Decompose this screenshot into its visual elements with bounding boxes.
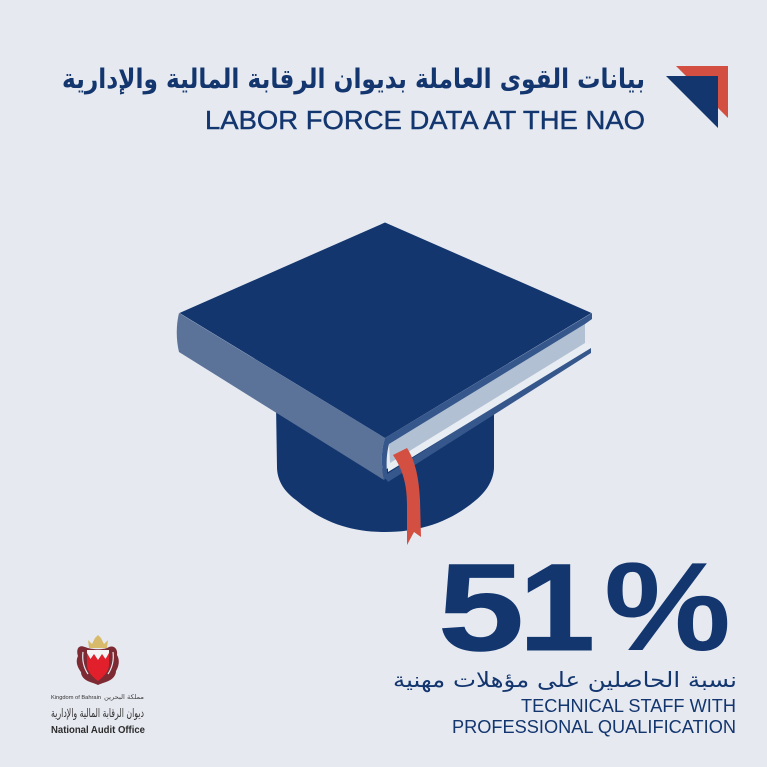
ribbon bookmark bbox=[393, 448, 421, 545]
label: English caption line 2: PROFESSIONAL QUALIFICATION bbox=[452, 716, 736, 737]
heading: Arabic title: بيانات القوى العاملة بديوان الرقابة المالية والإدارية bbox=[62, 64, 645, 95]
cap base cylinder bbox=[276, 405, 494, 532]
text: National Audit Office: National Audit Office bbox=[51, 725, 145, 736]
emblem: crown bbox=[88, 635, 108, 648]
logo: National Audit Office bbox=[51, 635, 145, 736]
text: Arabic office name: ديوان الرقابة المالية والإدارية bbox=[51, 706, 144, 721]
statistic: 51 percent bbox=[438, 536, 731, 677]
book back cover bbox=[384, 345, 591, 482]
emblem: shield bbox=[87, 653, 109, 681]
statistic: 51 percent: 1 bbox=[519, 539, 595, 677]
book spine bbox=[177, 313, 385, 480]
statistic: 51 percent: 5 bbox=[438, 539, 524, 677]
book top cover bbox=[180, 222, 592, 438]
text: Kingdom of Bahrain: Kingdom of Bahrain bbox=[51, 695, 101, 701]
label: English caption line 1: TECHNICAL STAFF WITH bbox=[521, 695, 736, 716]
emblem: mantling bbox=[77, 646, 119, 685]
label: Arabic caption: نسبة الحاصلين على مؤهلات مهنية bbox=[393, 668, 737, 692]
book pages bbox=[388, 324, 591, 472]
book hinge bbox=[382, 313, 592, 480]
statistic: 51 percent: % bbox=[604, 536, 731, 677]
icon: graduation cap made of a book bbox=[177, 222, 592, 545]
icon: header double triangle bbox=[666, 66, 728, 128]
text: Arabic kingdom name: مملكة البحرين bbox=[104, 693, 144, 701]
heading: English title: LABOR FORCE DATA AT THE NAO bbox=[205, 105, 645, 135]
